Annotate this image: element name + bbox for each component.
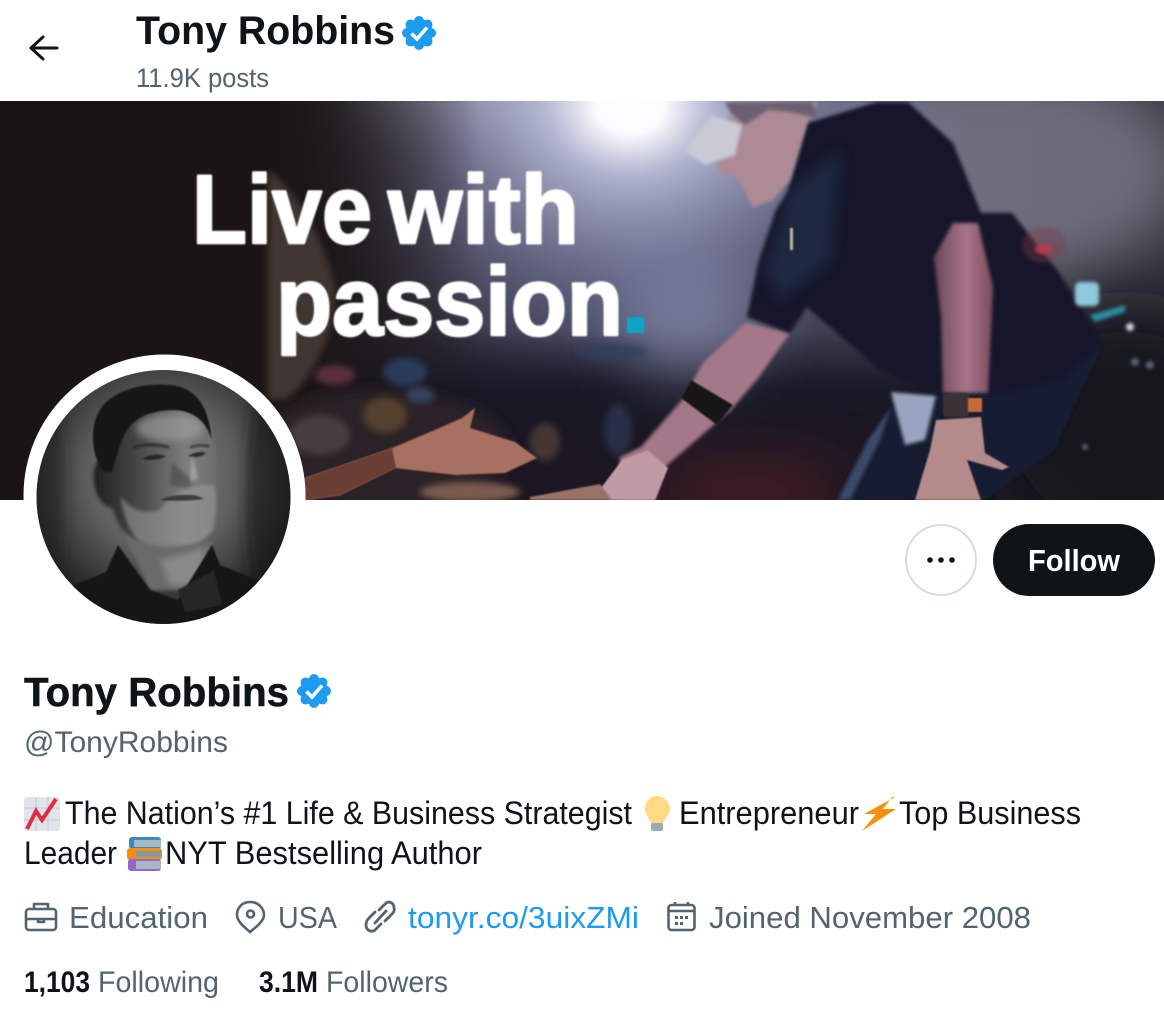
- stage lights: [1022, 227, 1154, 450]
- crowd: [250, 170, 648, 510]
- post count: 11.9K posts: [136, 63, 269, 93]
- banner headline: with: [387, 155, 579, 264]
- shirt: [72, 544, 258, 624]
- neck: [122, 530, 212, 590]
- banner image: [0, 101, 1164, 500]
- bio: Top Business: [899, 795, 1081, 831]
- handle: @TonyRobbins: [24, 726, 228, 759]
- profile meta row: [26, 900, 1031, 935]
- follower stats: Followers: [326, 966, 448, 999]
- man: right arm: [915, 223, 1009, 500]
- forehead highlight: [136, 415, 204, 441]
- follower stats: 3.1M: [259, 966, 318, 999]
- banner headline: passion: [276, 247, 623, 356]
- icon: verified badge: [297, 674, 331, 708]
- icon: chart emoji: [24, 797, 60, 831]
- profile meta row: tonyr.co/3uixZMi: [408, 900, 639, 935]
- profile meta row: USA: [278, 900, 337, 935]
- banner headline: [192, 155, 644, 356]
- more options button: [906, 525, 976, 595]
- ear and face: [94, 405, 216, 553]
- follow button: [993, 524, 1155, 596]
- follower stats: [24, 966, 448, 999]
- icon: link: [366, 902, 394, 931]
- hair: [93, 384, 212, 472]
- profile meta row: Joined November 2008: [709, 900, 1031, 935]
- reaching hand: [305, 408, 537, 500]
- header title: Tony Robbins: [136, 9, 395, 53]
- man: shirt: [747, 102, 1103, 395]
- follower stats: 1,103: [24, 966, 90, 999]
- profile meta row: Education: [69, 900, 208, 935]
- bio: NYT Bestselling Author: [165, 835, 482, 871]
- eyes, mouth: [133, 443, 210, 501]
- icon: map pin: [237, 902, 264, 932]
- icon: lightning emoji: [862, 797, 896, 831]
- bio: [24, 795, 1081, 871]
- follower stats: Following: [98, 966, 219, 999]
- bio: The Nation’s #1 Life & Business Strategist: [65, 795, 632, 831]
- icon: books emoji: [127, 837, 162, 871]
- man: left arm and hand: [530, 323, 790, 500]
- man: jeans: [835, 346, 1100, 500]
- wristband: [681, 380, 733, 425]
- banner headline: Live: [192, 155, 372, 264]
- beard: [120, 485, 216, 553]
- icon: briefcase: [26, 904, 56, 930]
- avatar: [24, 354, 306, 640]
- back arrow: [31, 37, 57, 59]
- follow button: Follow: [1028, 543, 1121, 578]
- bio: Entrepreneur: [679, 795, 859, 831]
- bio: Leader: [24, 835, 117, 871]
- icon: light bulb emoji: [645, 796, 670, 831]
- icon: verified badge: [402, 16, 436, 50]
- icon: calendar: [668, 902, 695, 930]
- man: head: [684, 102, 818, 207]
- profile name: Tony Robbins: [24, 669, 289, 715]
